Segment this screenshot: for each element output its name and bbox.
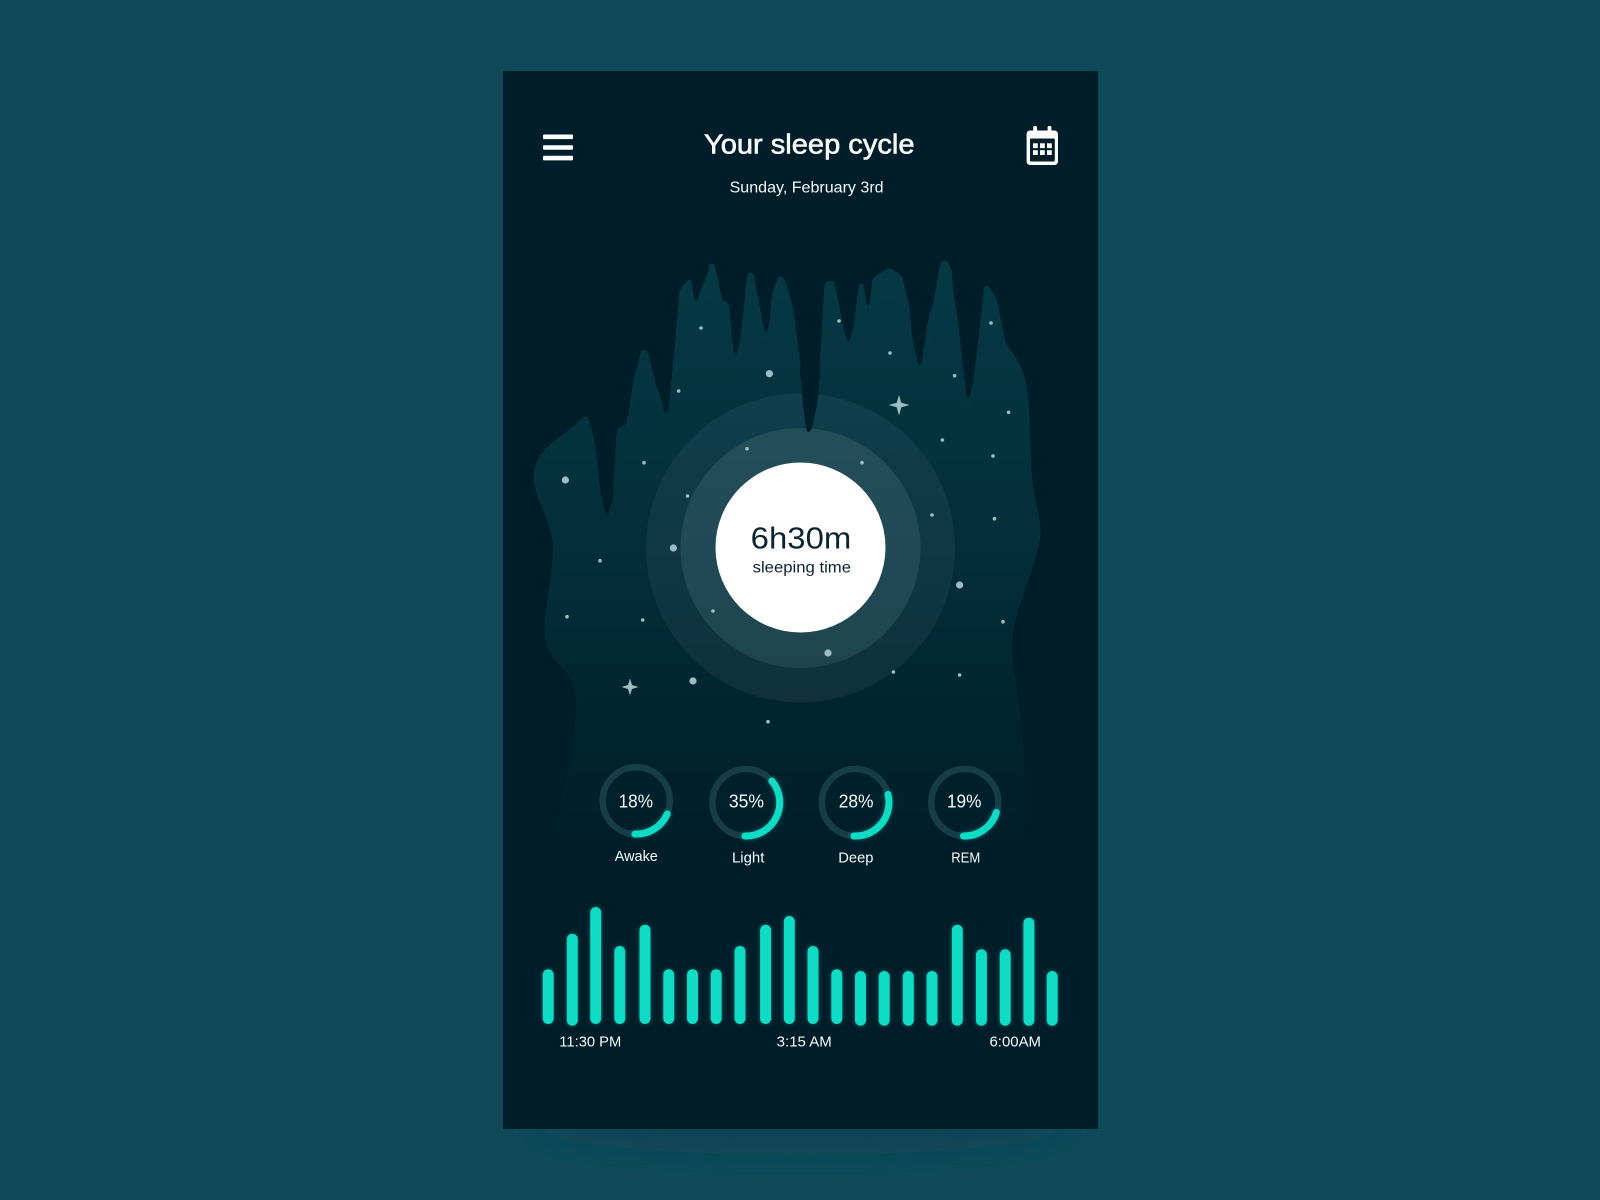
ring: awake 18%: 18%: [619, 791, 653, 811]
bar chart: [543, 907, 1058, 1026]
panel shadow: [530, 1095, 1070, 1155]
stars: [562, 319, 1010, 724]
icon: calendar: [1027, 126, 1058, 165]
icon: sparkle lower left: [622, 678, 638, 696]
ring: REM 19%: REM: [951, 849, 980, 866]
ring: deep 28%: [822, 769, 889, 866]
ring: REM 19%: [931, 769, 998, 866]
time axis labels: [559, 1033, 1041, 1050]
time axis labels: 11:30 PM: [559, 1033, 621, 1050]
ring: light 35%: [712, 769, 780, 866]
ring: REM 19%: 19%: [947, 791, 981, 811]
ring: awake 18%: Awake: [615, 848, 658, 865]
icon: hamburger menu: [543, 134, 573, 160]
icon: sparkle upper right: [888, 395, 910, 416]
moon glow rings: [646, 394, 955, 702]
sleeping duration value: 6h30m: [751, 520, 851, 555]
time axis labels: 6:00AM: [990, 1033, 1041, 1050]
cave silhouette: [534, 260, 1040, 900]
ring: deep 28%: Deep: [838, 849, 874, 866]
sleeping time label: sleeping time: [753, 559, 851, 576]
time axis labels: 3:15 AM: [777, 1033, 832, 1050]
phone panel: [503, 71, 1098, 1129]
moon circle with sleeping time: [716, 462, 886, 632]
date subtitle: Sunday, February 3rd: [730, 179, 884, 196]
title: Your sleep cycle: [704, 128, 914, 159]
ring: deep 28%: 28%: [839, 791, 874, 811]
drip over rings: [800, 365, 820, 437]
ring: awake 18%: [603, 767, 670, 865]
ring: light 35%: 35%: [729, 791, 764, 811]
ring: light 35%: Light: [732, 849, 765, 866]
